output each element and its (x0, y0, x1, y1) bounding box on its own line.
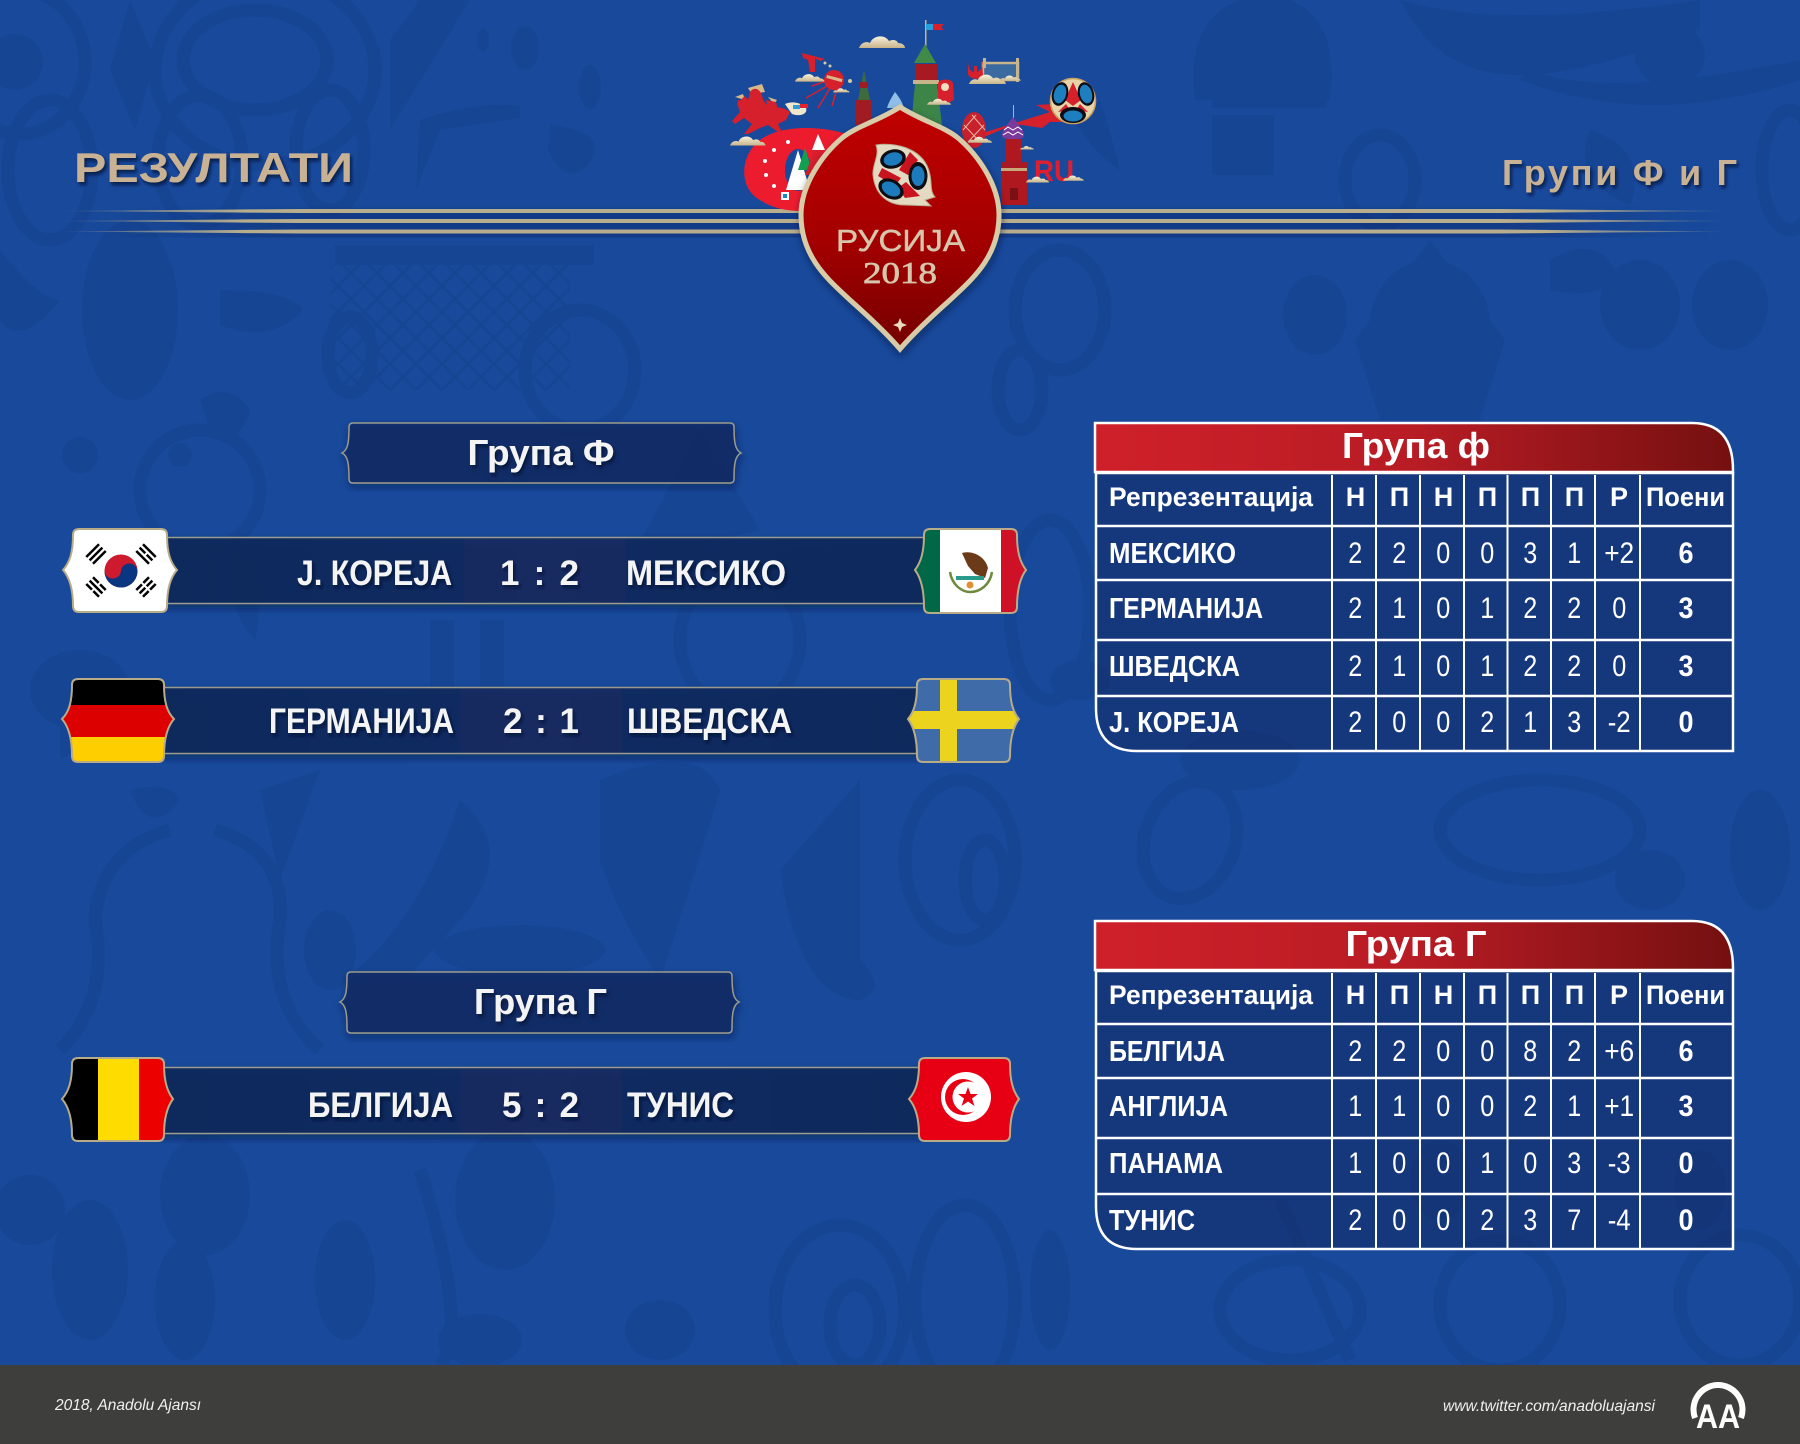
row: Белгија (1109, 1035, 1694, 1068)
row: Шведска: 0 (1612, 650, 1626, 683)
text: Мексико: МЕКСИКО (626, 554, 786, 593)
row: Англија: +1 (1604, 1090, 1634, 1123)
icon: red swirl (744, 128, 850, 211)
row: Панама: 1 (1348, 1147, 1362, 1180)
badge: Русија 2018 (801, 107, 999, 349)
column headers: Н (1434, 482, 1453, 512)
row: Шведска: 1 (1392, 650, 1406, 683)
icon: soccer ball (1049, 78, 1097, 124)
row: J. Кореја: 0 (1392, 706, 1406, 739)
row: Тунис: 0 (1678, 1204, 1694, 1237)
flag: Tunisia (909, 1058, 1019, 1141)
text: Германија: ГЕРМАНИЈА (269, 702, 454, 741)
row: Панама: 0 (1392, 1147, 1406, 1180)
row: Англија (1109, 1090, 1694, 1123)
table title bar (1095, 423, 1733, 472)
row: Шведска: 2 (1567, 650, 1581, 683)
row: Шведска: 0 (1436, 650, 1450, 683)
subtitle: Групи Ф и Г: Групи Ф и Г (1502, 152, 1737, 193)
icon: AA logo: AA (1696, 1398, 1740, 1436)
row: Мексико: МЕКСИКО (1109, 538, 1236, 570)
table: Група Ф standings (1095, 423, 1733, 751)
row: Англија: 0 (1480, 1090, 1494, 1123)
text: Тунис: ТУНИС (627, 1086, 734, 1125)
header rules (60, 209, 1727, 234)
row: Мексико: 2 (1348, 537, 1362, 570)
text: Белгија: БЕЛГИЈА (308, 1086, 453, 1125)
icon: red tower with purple dome (1001, 105, 1034, 205)
icon: flying figure and sputnik (802, 53, 852, 108)
column headers: П (1478, 482, 1497, 512)
row: Мексико: 0 (1480, 537, 1494, 570)
icon: AA logo (1694, 1385, 1742, 1436)
row: Тунис: 2 (1348, 1204, 1362, 1237)
column headers: Н (1346, 980, 1365, 1010)
row: Панама: 3 (1567, 1147, 1581, 1180)
row: Англија: 1 (1567, 1090, 1581, 1123)
row: J. Кореја (1109, 706, 1694, 739)
row: J. Кореја: 0 (1436, 706, 1450, 739)
table body (1096, 971, 1733, 1249)
illustration: world cup motifs (730, 20, 1097, 211)
row: Панама: 0 (1436, 1147, 1450, 1180)
match: Белгија 5:2 Тунис (55, 1055, 1019, 1145)
text: 2018: 2018 (863, 255, 937, 290)
row: Белгија: 0 (1480, 1035, 1494, 1068)
row: Мексико (1109, 537, 1694, 570)
row: Германија: 1 (1480, 592, 1494, 625)
column headers: Н (1434, 980, 1453, 1010)
row: Германија: 2 (1348, 592, 1362, 625)
row: J. Кореја: -2 (1608, 706, 1631, 739)
row: Мексико: 3 (1523, 537, 1537, 570)
row: Германија: 3 (1678, 592, 1694, 625)
footer bar (0, 1365, 1800, 1444)
column headers: Р (1610, 482, 1628, 512)
text: J. Кореја: J. КОРЕЈА (297, 554, 452, 593)
row: Германија: ГЕРМАНИЈА (1109, 593, 1263, 625)
text: Шведска: ШВЕДСКА (627, 702, 792, 741)
column headers (1109, 980, 1725, 1010)
icon: clouds (730, 36, 905, 146)
column headers: Н (1346, 482, 1365, 512)
icon: green tower (856, 20, 954, 125)
column headers: Поени (1646, 980, 1725, 1010)
row: Англија: 1 (1348, 1090, 1362, 1123)
footer url: www.twitter.com/anadoluajansi (1443, 1398, 1655, 1415)
group pill: Група Г: Група Г (474, 981, 607, 1022)
table title bar: Група Г (1346, 923, 1486, 964)
row: Мексико: +2 (1604, 537, 1634, 570)
column headers: П (1478, 980, 1497, 1010)
score: 2 : 1: 2 : 1 (503, 702, 579, 741)
column headers: П (1565, 980, 1584, 1010)
row: J. Кореја: 1 (1523, 706, 1537, 739)
icon: star (893, 318, 907, 332)
row: Тунис: 3 (1523, 1204, 1537, 1237)
flag: South Korea (63, 529, 177, 612)
column headers: П (1390, 980, 1409, 1010)
row: Тунис: ТУНИС (1109, 1205, 1195, 1237)
title: РЕЗУЛТАТИ: РЕЗУЛТАТИ (74, 144, 353, 191)
table body (1096, 473, 1733, 751)
row: Шведска: 2 (1348, 650, 1362, 683)
score bar (160, 538, 930, 604)
text: RU: RU (1034, 155, 1074, 188)
row: Панама: 0 (1523, 1147, 1537, 1180)
score: 5 : 2: 5 : 2 (502, 1086, 579, 1125)
row: Белгија: 8 (1523, 1035, 1537, 1068)
score: 1 : 2: 1 : 2 (500, 554, 579, 593)
row: Тунис: 2 (1480, 1204, 1494, 1237)
group pill: Група Ф (342, 423, 741, 483)
group pill: Група Ф: Група Ф (468, 432, 614, 473)
row: Панама: 1 (1480, 1147, 1494, 1180)
row: Шведска: 1 (1480, 650, 1494, 683)
table title bar (1095, 921, 1733, 970)
table: Група Г standings (1095, 921, 1733, 1249)
row: Мексико: 0 (1436, 537, 1450, 570)
flag: Sweden (906, 678, 1020, 763)
score bar (156, 688, 926, 754)
flag: Belgium (60, 1057, 174, 1142)
row: Шведска: 3 (1678, 650, 1694, 683)
icon: red horses (732, 84, 808, 134)
row: Германија (1109, 592, 1694, 625)
row: Тунис: 0 (1392, 1204, 1406, 1237)
column headers: Поени (1646, 482, 1725, 512)
column headers: П (1521, 482, 1540, 512)
row: Тунис: 7 (1567, 1204, 1581, 1237)
row: Тунис: 0 (1436, 1204, 1450, 1237)
row: Белгија: +6 (1604, 1035, 1634, 1068)
row: Мексико: 6 (1678, 537, 1694, 570)
column headers: Репрезентација (1109, 482, 1314, 512)
row: Германија: 2 (1567, 592, 1581, 625)
column headers (1109, 482, 1725, 512)
row: J. Кореја: 0 (1678, 706, 1694, 739)
column headers: П (1390, 482, 1409, 512)
row: Мексико: 2 (1392, 537, 1406, 570)
row: Белгија: БЕЛГИЈА (1109, 1036, 1225, 1068)
row: Англија: 3 (1678, 1090, 1694, 1123)
flag: Germany (60, 678, 176, 763)
row: Шведска: 2 (1523, 650, 1537, 683)
row: Белгија: 0 (1436, 1035, 1450, 1068)
row: Англија: 2 (1523, 1090, 1537, 1123)
row: Тунис (1109, 1204, 1694, 1237)
column headers: Репрезентација (1109, 980, 1314, 1010)
row: Англија: АНГЛИЈА (1109, 1091, 1228, 1123)
row: Германија: 0 (1436, 592, 1450, 625)
column headers: П (1565, 482, 1584, 512)
column headers: Р (1610, 980, 1628, 1010)
score bar (156, 1068, 926, 1134)
column headers: П (1521, 980, 1540, 1010)
row: Панама: 0 (1678, 1147, 1694, 1180)
row: Германија: 0 (1612, 592, 1626, 625)
row: Панама: -3 (1608, 1147, 1631, 1180)
flag: Mexico (914, 528, 1028, 614)
row: Мексико: 1 (1567, 537, 1581, 570)
row: Белгија: 6 (1678, 1035, 1694, 1068)
footer credit: 2018, Anadolu Ajansı (54, 1397, 201, 1414)
row: J. Кореја: 2 (1348, 706, 1362, 739)
row: Шведска: ШВЕДСКА (1109, 651, 1240, 683)
row: Белгија: 2 (1348, 1035, 1362, 1068)
row: Шведска (1109, 650, 1694, 683)
group pill: Група Г (340, 972, 739, 1033)
row: Панама: ПАНАМА (1109, 1148, 1223, 1180)
row: Германија: 1 (1392, 592, 1406, 625)
row: J. Кореја: J. КОРЕЈА (1109, 707, 1239, 739)
row: Германија: 2 (1523, 592, 1537, 625)
icon: ribbon and egg (960, 104, 1062, 148)
row: Тунис: -4 (1608, 1204, 1631, 1237)
match: Германија 2:1 Шведска (55, 675, 1025, 767)
row: Белгија: 2 (1392, 1035, 1406, 1068)
row: Англија: 0 (1436, 1090, 1450, 1123)
icon: goal (968, 58, 1021, 84)
icon: tournament emblem (873, 144, 935, 206)
text: РУСИЈА: РУСИЈА (836, 223, 965, 258)
match: J. Кореја 1:2 Мексико (63, 525, 1031, 620)
row: J. Кореја: 2 (1480, 706, 1494, 739)
row: Панама (1109, 1147, 1694, 1180)
table title bar: Група ф (1342, 425, 1490, 466)
row: Англија: 1 (1392, 1090, 1406, 1123)
row: J. Кореја: 3 (1567, 706, 1581, 739)
row: Белгија: 2 (1567, 1035, 1581, 1068)
